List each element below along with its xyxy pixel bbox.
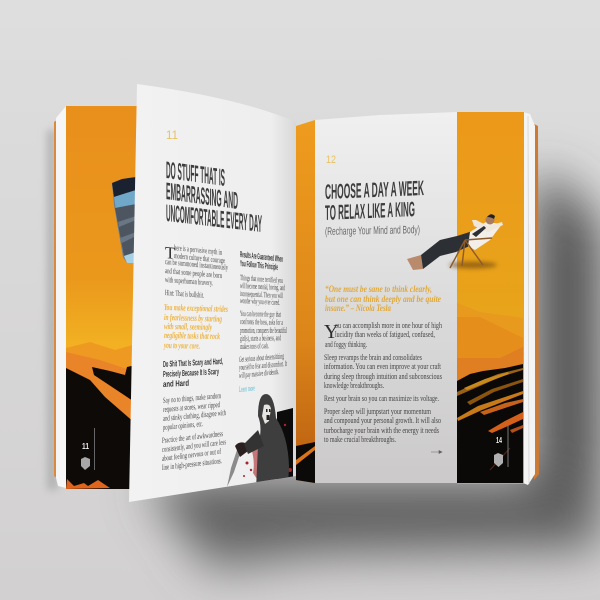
column two heading (240, 249, 283, 272)
column one body text: and stinky clothing, disagree with (163, 408, 226, 423)
quote: but one can think deeply and be quite (325, 295, 442, 305)
panel: flipping left page (129, 84, 296, 502)
column one intro text: Hint: That is bullshit. (165, 288, 204, 300)
panel: flipping left page: Things that once terrified you (240, 273, 283, 285)
orange callout: in fearlessness by starting (164, 312, 222, 324)
right page body text: to make crucial breakthroughs. (324, 434, 396, 444)
subheading: Precisely Because It Is Scary (163, 366, 219, 379)
right page body text: Rest your brain so you can maximize its voltage. (324, 393, 439, 403)
spine caption (94, 428, 95, 470)
column one body text: consistently, and you will care less (162, 437, 226, 454)
right page body text (324, 320, 443, 444)
right page body text: ou can accomplish more in one hour of high (335, 320, 443, 330)
column two text (239, 273, 287, 394)
column two text: Learn more (239, 383, 255, 394)
sunset hills (457, 303, 523, 400)
icon: lion badge (81, 457, 90, 470)
panel: flipping left page: You Follow This Principle (240, 258, 278, 272)
column two text: wonder why you ever cared. (240, 296, 280, 307)
panel: flipping left page: EMBARRASSING AND (166, 178, 238, 215)
column one body text: about feeling nervous or out of (162, 447, 221, 463)
column one body text: Practice the art of awkwardness (162, 429, 223, 445)
column one body text: popular opinions, etc. (163, 419, 203, 432)
text: CHOOSE A DAY A WEEK (325, 177, 424, 204)
heading (166, 157, 262, 238)
panel: flipping left page: promotion, conquers the beautiful (240, 326, 287, 335)
right page body text: Y (324, 321, 338, 343)
column one intro text: here is a pervasive myth in (174, 243, 222, 257)
panel: flipping left page: will become menial, boring, and (240, 281, 285, 292)
quote (325, 284, 442, 314)
column one intro text: can be summoned instantaneously (165, 257, 228, 272)
panel: flipping left page: DO STUFF THAT IS (166, 157, 225, 192)
text: Results Are Guaranteed When (240, 249, 283, 264)
spine caption (508, 425, 509, 467)
panel: left page art (54, 106, 138, 489)
text: TO RELAX LIKE A KING (325, 198, 415, 225)
right page page number: 12 (326, 154, 336, 166)
column two text: makes tons of cash. (240, 341, 269, 351)
right page body text: knowledge breakthroughs. (324, 380, 384, 390)
panel: right page (296, 112, 539, 485)
orange callout: you to your core. (163, 340, 200, 351)
orange callout (163, 302, 228, 351)
panel: flipping left page: inconsequential. Then you will (240, 289, 283, 300)
icon: supplement jar (112, 177, 136, 263)
illustration: relaxing man (407, 214, 503, 270)
column two text: will pay massive dividends. (239, 367, 279, 380)
right page body text: lucidity than weeks of fatigued, confused, (335, 329, 435, 339)
right page body text: Sleep revamps the brain and consolidates (324, 352, 422, 362)
orange callout: with small, seemingly (164, 321, 213, 332)
right page heading: (Recharge Your Mind and Body) (325, 224, 420, 238)
illustration: masked figure (227, 394, 293, 490)
column two text: You can become the guy that (240, 309, 281, 319)
panel: flipping left page: Get serious about desensitizing (239, 351, 284, 364)
icon: lion badge (494, 453, 503, 467)
column two text: girl(s), starts a business, and (240, 333, 281, 343)
column one intro text: and that some people are born (165, 266, 222, 280)
column one body text: requests at stores, wear ripped (163, 400, 220, 414)
right page body text: and foggy thinking. (325, 339, 367, 349)
orange callout: negligible tasks that rock (164, 330, 220, 341)
column one intro text: with superhuman bravery. (165, 275, 213, 287)
right page body text: information. You can even improve at your craft (324, 361, 441, 371)
column one intro text: T (165, 243, 176, 263)
panel: flipping left page: Do Shit That Is Scary and Hard, (163, 356, 223, 369)
arrow (431, 450, 442, 454)
column two text: confronts the boss, asks for a (240, 317, 283, 327)
column one body text (162, 391, 226, 472)
subheading: and Hard (163, 378, 189, 389)
subheading (163, 356, 223, 389)
column one body text: line in high-pressure situations. (162, 456, 222, 472)
page number: 14 (496, 436, 502, 445)
right page body text: and compound your personal growth. It will also (324, 415, 441, 425)
right page heading (325, 177, 424, 238)
column one intro text (165, 243, 228, 300)
page number: 11 (82, 442, 89, 451)
right page body text: during sleep through intuition and subconscious (324, 371, 442, 381)
column one intro text: modern culture that courage (174, 251, 225, 265)
text: UNCOMFORTABLE EVERY DAY (166, 200, 262, 238)
orange callout: You make exceptional strides (164, 302, 228, 314)
column one body text: Say no to things, make random (163, 391, 221, 405)
quote: “One must be sane to think clearly, (325, 284, 432, 295)
page number 11: 11 (166, 128, 178, 142)
brush artwork (457, 364, 523, 483)
book shadow (47, 130, 600, 570)
right page body text: Proper sleep will jumpstart your momentum (324, 406, 431, 416)
quote: insane.” – Nicola Tesla (325, 304, 391, 314)
panel: flipping left page: yourself to fear and discomfort. It (239, 359, 287, 372)
right page body text: turbocharge your brain with the energy it needs (324, 425, 439, 435)
